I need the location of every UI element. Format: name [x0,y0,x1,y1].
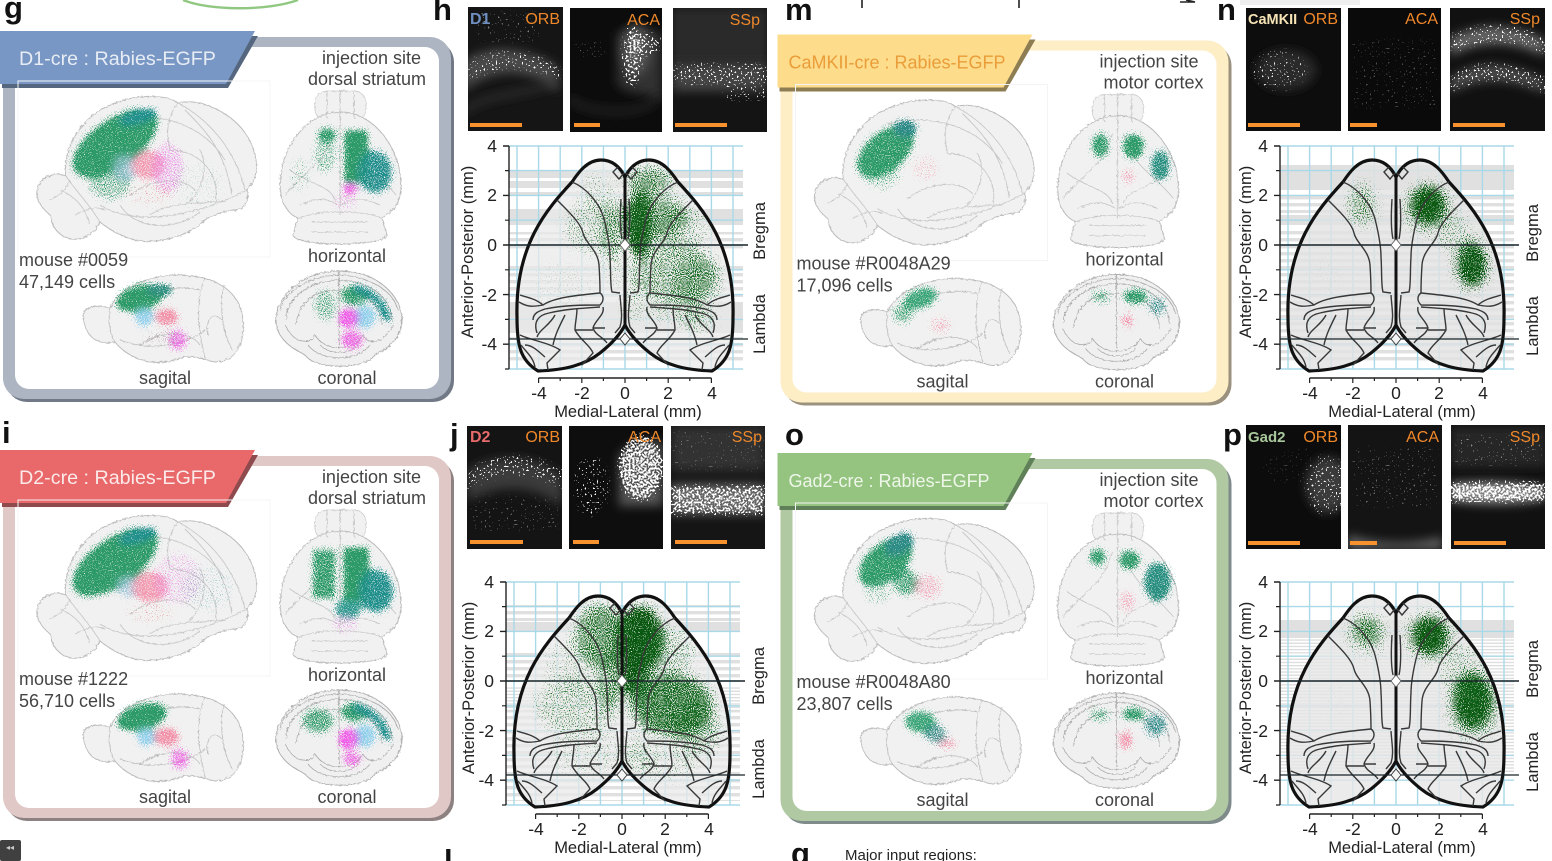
view and mouse labels: 23,807 cells [796,694,893,714]
micrograph: D1 ACA: ACA [627,12,660,29]
scatter: iso brain [60,514,234,624]
view and mouse labels [796,668,1164,810]
scatter: horizontal brain [290,127,393,211]
view and mouse labels: mouse #1222 [19,669,128,689]
view and mouse labels: sagital [916,790,969,810]
sampling bands [506,605,740,801]
injection label: dorsal striatum [308,488,426,508]
axis tick labels [1252,572,1488,839]
axis tick labels: -2 [1345,383,1361,403]
axis tick labels: 4 [484,572,494,592]
panel g: D1-cre [0,31,454,402]
injection label: injection site [1099,470,1198,490]
axis tick labels: -4 [1302,383,1318,403]
view and mouse labels: sagital [916,372,969,392]
axis titles: Anterior-Posterior (mm) [459,166,477,338]
scatter: iso brain [849,527,942,604]
axis tick labels: -4 [531,383,547,403]
cortex fill [515,155,735,375]
view and mouse labels: 56,710 cells [19,691,115,711]
axis tick labels: 0 [617,819,627,839]
view and mouse labels: 17,096 cells [796,276,893,296]
injection label [1099,52,1204,92]
axis tick labels: 0 [487,235,497,255]
axis tick labels: 2 [1434,819,1444,839]
micrographs h [463,7,767,132]
injection label: motor cortex [1103,72,1204,92]
axis tick labels [481,136,717,403]
view and mouse labels: coronal [317,368,377,388]
banner [778,453,1032,506]
scatter: horizontal brain [1092,132,1170,184]
micrograph: D2 ORB [467,426,562,549]
injection label: motor cortex [1103,491,1204,511]
view and mouse labels: mouse #R0048A80 [796,672,951,692]
banner title: D2-cre : Rabies-EGFP [19,467,216,489]
view and mouse labels: mouse #R0048A29 [796,254,951,274]
axis titles: Bregma [1524,639,1542,698]
scatter: sagittal brain [112,279,188,351]
cortex fill [512,591,732,811]
injection label: injection site [1099,52,1198,72]
micrograph: D1 SSp [673,8,767,132]
micrograph: Gad2 SSp: SSp [1510,429,1540,446]
axis titles: Lambda [751,293,769,354]
injection label [308,48,426,89]
micrograph: D2 ACA [569,426,663,549]
banner shadow [2,455,258,507]
axis tick labels [1252,136,1488,403]
view and mouse labels: coronal [317,787,377,807]
scatter: horizontal brain [312,547,394,633]
axis titles: Anterior-Posterior (mm) [1237,602,1255,774]
micrograph: Gad2 ORB: ORB [1303,429,1338,446]
scatter: labelled neurons [535,602,721,781]
axis tick labels: -2 [1252,285,1268,305]
axis titles [460,602,768,857]
micrograph: CaMKII SSp [1450,8,1545,131]
micrograph: D1 ORB [468,7,563,131]
scatter: coronal brain [313,284,392,350]
chart j: D2 flatmap [460,572,768,857]
chart n: CaMKII flatmap [1237,136,1542,421]
banner [0,31,255,84]
view and mouse labels: horizontal [1085,668,1164,688]
button: collapse control [0,840,21,861]
micrograph: D1 ORB: ORB [525,11,560,28]
label j: j [449,417,459,452]
micrographs p [1246,425,1545,549]
arc: cropped top green curve [183,0,298,8]
view and mouse labels: coronal [1095,790,1154,810]
brain renderings [796,503,1180,788]
micrographs n [1246,8,1545,131]
brain renderings [18,500,402,785]
micrograph: D2 SSp: SSp [732,429,762,446]
axis tick labels: 0 [1258,671,1268,691]
axis titles: Lambda [1524,731,1542,792]
view and mouse labels: sagital [139,787,191,807]
micrograph: CaMKII ACA [1348,8,1441,131]
axis titles: Anterior-Posterior (mm) [460,602,478,774]
label p: p [1223,417,1242,452]
scatter: horizontal brain [1088,548,1172,613]
brain renderings [18,81,402,366]
panel m: CaMKII-cre [778,34,1232,406]
axis tick labels: -2 [481,285,497,305]
scatter: coronal brain [301,702,392,767]
axis tick labels: -4 [1252,770,1268,790]
button: collapse control: ◂◂ [6,843,14,852]
axis tick labels: -4 [1252,334,1268,354]
injection label: injection site [322,467,421,487]
axis titles [1237,602,1542,857]
scatter: labelled neurons [1320,610,1504,742]
axis tick labels: 0 [620,383,630,403]
view and mouse labels: horizontal [308,665,386,685]
axis tick labels: 0 [1391,819,1401,839]
micrograph: Gad2 ACA: ACA [1406,429,1439,446]
panel i: D2-cre [0,450,454,821]
scatter: iso brain [847,114,940,190]
axis tick labels: -2 [1252,721,1268,741]
micrographs j [467,426,765,549]
cortex fill [1286,155,1506,375]
axis titles: Medial-Lateral (mm) [1328,839,1476,857]
axis tick labels: -4 [478,770,494,790]
scatter: coronal brain [1090,288,1166,328]
axis tick labels: 4 [487,136,497,156]
banner title: D1-cre : Rabies-EGFP [19,48,216,70]
axis tick labels: 2 [663,383,673,403]
axis titles [1237,166,1542,421]
label o: o [785,417,804,452]
axis titles: Lambda [1524,295,1542,356]
scatter: coronal brain [1090,707,1168,750]
axis tick labels: 4 [1478,819,1488,839]
chart p: Gad2 flatmap [1237,572,1542,857]
axis tick labels: 2 [487,185,497,205]
banner shadow [780,40,1036,92]
axis tick labels: -2 [1345,819,1361,839]
micrograph: CaMKII ORB: ORB [1303,11,1338,28]
view and mouse labels: horizontal [308,246,386,266]
banner shadow [2,36,258,88]
axis titles: Anterior-Posterior (mm) [1237,166,1255,338]
axis titles: Medial-Lateral (mm) [554,403,702,421]
scatter: iso brain [60,95,226,209]
label i: i [2,415,11,450]
axis tick labels: -2 [574,383,590,403]
micrograph: Gad2 SSp [1451,425,1545,549]
micrograph: Gad2 ORB [1246,425,1341,549]
axis titles: Lambda [750,738,768,799]
scatter: labelled neurons [1310,182,1488,297]
sampling bands [1280,620,1514,773]
banner [778,34,1032,88]
micrograph: D2 ORB: D2 [470,429,491,446]
injection label: injection site [322,48,421,68]
axis tick labels: 4 [704,819,714,839]
injection label [1099,470,1204,511]
view and mouse labels [19,246,386,388]
cortex fill [1286,591,1506,811]
micrograph: D1 ACA [570,8,662,132]
axis tick labels [478,572,714,839]
micrograph: Gad2 ORB: Gad2 [1248,429,1286,446]
micrograph: CaMKII ORB [1246,8,1341,131]
axis tick labels: -4 [481,334,497,354]
axis tick labels: 2 [1258,185,1268,205]
axis tick labels: 2 [1258,621,1268,641]
micrograph: CaMKII SSp: SSp [1510,11,1540,28]
axis tick labels: 0 [1391,383,1401,403]
axis tick labels: 4 [1478,383,1488,403]
axis tick labels: -2 [571,819,587,839]
micrograph: D2 ORB: ORB [525,429,560,446]
panel o: Gad2-cre [778,453,1232,824]
axis tick labels: 2 [1434,383,1444,403]
sampling bands [509,170,743,363]
axis tick labels: 2 [660,819,670,839]
banner shadow [780,458,1036,510]
axis titles: Medial-Lateral (mm) [1328,403,1476,421]
axis tick labels: -2 [478,721,494,741]
axis tick labels: 0 [1258,235,1268,255]
banner title: Gad2-cre : Rabies-EGFP [788,471,990,491]
axis titles: Bregma [750,646,768,705]
axis titles [459,166,769,421]
banner title: CaMKII-cre : Rabies-EGFP [788,52,1006,72]
axis tick labels: -4 [1302,819,1318,839]
axis tick labels: 4 [1258,572,1268,592]
axis tick labels: 4 [707,383,717,403]
shaded corner at top [1240,0,1360,5]
micrograph: CaMKII ORB: CaMKII [1248,12,1297,28]
micrograph: D1 ORB: D1 [470,11,491,28]
axis tick labels: 4 [1258,136,1268,156]
axis fragment at top of the page [862,0,1195,8]
view and mouse labels: sagital [139,368,191,388]
sampling bands [1280,165,1514,363]
micrograph: CaMKII ACA: ACA [1405,11,1438,28]
scatter: labelled neurons [531,166,721,331]
chart h: D1 flatmap [459,136,769,421]
view and mouse labels: coronal [1095,372,1154,392]
view and mouse labels: 47,149 cells [19,272,115,292]
scatter: sagittal brain [904,711,958,750]
axis titles: Medial-Lateral (mm) [554,839,702,857]
micrograph: D1 SSp: SSp [730,12,760,29]
micrograph: D2 SSp [671,426,765,549]
micrograph: Gad2 ACA [1348,425,1442,549]
micrograph: D2 ACA: ACA [628,429,661,446]
injection label: dorsal striatum [308,69,426,89]
axis tick labels: 2 [484,621,494,641]
axis tick labels: -4 [528,819,544,839]
scatter: sagittal brain [892,283,952,334]
view and mouse labels: horizontal [1085,250,1164,270]
view and mouse labels [796,250,1164,392]
scatter: sagittal brain [114,698,190,770]
view and mouse labels [19,665,386,807]
axis titles: Bregma [751,201,769,260]
axis titles: Bregma [1524,203,1542,262]
axis tick labels: 0 [484,671,494,691]
injection label [308,467,426,508]
brain renderings [796,84,1180,370]
view and mouse labels: mouse #0059 [19,250,128,270]
banner [0,450,255,503]
